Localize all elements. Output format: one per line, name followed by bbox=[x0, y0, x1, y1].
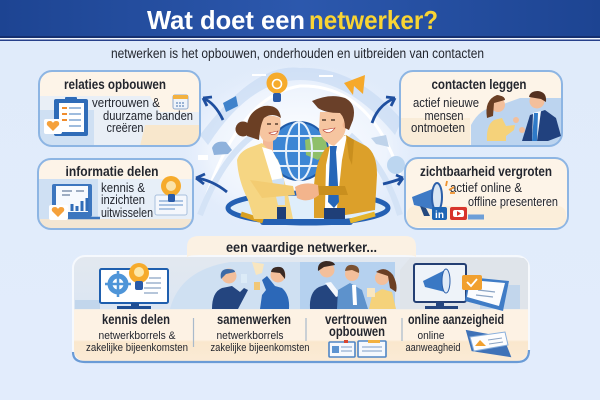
text: offline presenteren bbox=[468, 195, 558, 209]
icon: YouTube bbox=[450, 207, 467, 220]
woman bbox=[236, 106, 295, 219]
title banner: netwerker? bbox=[309, 5, 438, 35]
text bbox=[101, 181, 153, 220]
icon: monitor with megaphone bbox=[414, 264, 466, 309]
column: kennis delen: zakelijke bijeenkomsten bbox=[86, 342, 188, 354]
title banner bbox=[0, 0, 600, 41]
icon: stacked cards bbox=[464, 330, 513, 357]
column: samenwerken bbox=[210, 262, 310, 354]
icon: LinkedIn: in bbox=[435, 210, 444, 221]
man bbox=[295, 96, 377, 219]
text bbox=[450, 181, 558, 209]
handshake bbox=[295, 183, 319, 200]
panel: contacten leggen bbox=[400, 71, 562, 146]
icon: light bulb bbox=[266, 72, 288, 102]
heading: relaties opbouwen bbox=[64, 76, 166, 92]
arrow: to zichtbaarheid vergroten bbox=[383, 175, 403, 185]
arrow: to relaties opbouwen bbox=[203, 97, 223, 120]
column: samenwerken: netwerkborrels bbox=[216, 330, 284, 342]
panel: relaties opbouwen bbox=[39, 71, 200, 146]
text: inzichten bbox=[101, 193, 145, 207]
text: uitwisselen bbox=[101, 206, 153, 220]
icon: monitor with gear and bulb bbox=[100, 263, 168, 309]
title banner: Wat doet een bbox=[147, 5, 305, 35]
icon: light bulb and note bbox=[155, 176, 187, 215]
icon: chat bubble bbox=[371, 135, 389, 147]
text: ontmoeten bbox=[411, 121, 465, 135]
globe bbox=[270, 122, 328, 180]
divider bbox=[192, 318, 194, 347]
text: duurzame banden bbox=[103, 109, 193, 123]
illustration: three people talking bbox=[310, 261, 397, 309]
icon: megaphone bbox=[412, 181, 455, 216]
panel: informatie delen bbox=[38, 159, 193, 229]
text bbox=[92, 96, 193, 135]
text: actief nieuwe bbox=[413, 96, 479, 110]
column: online aanzeigheid bbox=[406, 264, 513, 357]
icon: gear bbox=[387, 156, 405, 174]
column: kennis delen bbox=[86, 263, 188, 354]
column: online aanzeigheid: online bbox=[418, 330, 444, 342]
panel: zichtbaarheid vergroten bbox=[405, 158, 568, 229]
central illustration: networker handshake bbox=[173, 62, 423, 238]
icon: gear cloud bbox=[212, 142, 232, 155]
heading: informatie delen bbox=[66, 163, 158, 179]
icon: heart bubble bbox=[49, 205, 68, 220]
illustration: two people talking bbox=[486, 91, 561, 141]
icon: envelope bbox=[223, 96, 238, 112]
text: mensen bbox=[424, 109, 464, 123]
divider bbox=[305, 318, 307, 341]
tab: een vaardige netwerker: een vaardige netwerker... bbox=[226, 239, 377, 255]
text: vertrouwen & bbox=[92, 96, 161, 110]
text: actief online & bbox=[450, 181, 523, 195]
arrow: to contacten leggen bbox=[372, 97, 395, 123]
illustration: two men toasting bbox=[212, 262, 289, 309]
icon: heart bubble bbox=[44, 119, 62, 134]
column: online aanzeigheid: aanweagheid bbox=[406, 342, 460, 354]
column: samenwerken: zakelijke bijeenkomsten bbox=[210, 342, 310, 354]
column: kennis delen: kennis delen bbox=[102, 311, 170, 327]
text: kennis & bbox=[101, 181, 146, 195]
column: vertrouwen opbouwen: opbouwen bbox=[329, 323, 385, 339]
icon: paper plane bbox=[344, 75, 365, 95]
column: samenwerken: samenwerken bbox=[217, 311, 291, 327]
text bbox=[411, 96, 479, 135]
divider bbox=[401, 318, 403, 341]
subtitle: netwerken is het opbouwen, onderhouden en uitbreiden van contacten bbox=[111, 46, 484, 61]
icon: LinkedIn bbox=[432, 207, 447, 221]
icon: monitor chart bbox=[52, 184, 100, 218]
icon: calendar bbox=[173, 95, 188, 109]
heading: contacten leggen bbox=[432, 76, 526, 92]
column: kennis delen: netwerkborrels & bbox=[98, 330, 176, 342]
tab: een vaardige netwerker bbox=[187, 236, 416, 258]
column: online aanzeigheid: online aanzeigheid bbox=[408, 311, 504, 327]
column: vertrouwen opbouwen: vertrouwen bbox=[325, 311, 387, 327]
network halo background bbox=[173, 62, 423, 238]
icon: document with check badge bbox=[462, 275, 509, 311]
icon: two note cards bbox=[329, 340, 386, 357]
text: creëren bbox=[106, 121, 144, 135]
heading: zichtbaarheid vergroten bbox=[420, 163, 552, 179]
ring platform bbox=[228, 193, 388, 223]
icon: clipboard bbox=[54, 97, 88, 136]
column: vertrouwen opbouwen bbox=[310, 261, 397, 357]
panel: een vaardige netwerker bbox=[73, 256, 529, 362]
arrow: to informatie delen bbox=[196, 174, 227, 192]
